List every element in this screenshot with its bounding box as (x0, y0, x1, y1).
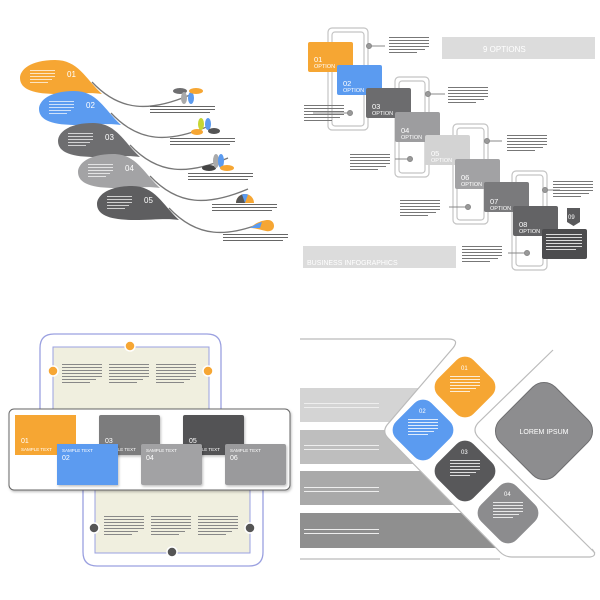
sample boxes: SAMPLE TEXT (21, 447, 52, 452)
diamond 02: 02 (419, 409, 426, 415)
sample boxes: SAMPLE TEXT (62, 448, 93, 453)
option boxes: 04 (401, 126, 409, 135)
drop 01: 01 (67, 70, 76, 79)
outer frame top (40, 334, 221, 410)
option boxes: OPTION (401, 135, 422, 141)
panel: 9 options (303, 28, 595, 270)
cream panel bottom (95, 489, 250, 553)
footer bar: business infographics (303, 246, 456, 268)
drop 03: 03 (105, 133, 114, 142)
drop 05 (97, 186, 267, 232)
option boxes: 05 (431, 149, 439, 158)
diamond 04 (473, 478, 543, 548)
diamond 04: 04 (504, 492, 511, 498)
sample boxes: 01 (21, 438, 29, 445)
connector dots and lines (313, 44, 560, 256)
sample boxes: SAMPLE TEXT (146, 448, 177, 453)
diamond 02 (388, 395, 458, 465)
diamond 01: 01 (461, 366, 468, 372)
diamond: lorem ipsum (489, 376, 599, 486)
sample boxes: 02 (62, 455, 70, 462)
chevron band fill (385, 342, 595, 557)
drop 02 (39, 91, 209, 137)
footer bar: business infographics: BUSINESS INFOGRAPHICS (307, 260, 398, 267)
drop 04 (78, 154, 248, 200)
sample boxes: 05 (189, 438, 197, 445)
option boxes: OPTION (372, 111, 393, 117)
panel: diamonds lorem ipsum (300, 339, 599, 559)
text blocks (62, 364, 238, 535)
diamond: lorem ipsum: LOREM IPSUM (519, 429, 569, 436)
option boxes: 08 (519, 220, 527, 229)
option boxes: 02 (343, 79, 351, 88)
panel: sample text frame (9, 334, 290, 566)
option boxes: 03 (372, 102, 380, 111)
sample boxes (15, 415, 286, 485)
drop 05: 05 (144, 196, 153, 205)
option boxes: OPTION (490, 206, 511, 212)
dots (48, 341, 255, 557)
sample boxes: 04 (146, 455, 154, 462)
icon: flower 3 (202, 154, 234, 171)
option boxes: OPTION (343, 88, 364, 94)
diamond 03 (430, 436, 500, 506)
sample boxes: SAMPLE TEXT (230, 448, 261, 453)
drop 04: 04 (125, 164, 134, 173)
icon: flower 1 (173, 88, 203, 104)
diamond 03: 03 (461, 450, 468, 456)
bars (300, 388, 497, 548)
header bar: 9 options (442, 37, 595, 59)
chevron outlines (300, 339, 595, 559)
sample boxes: SAMPLE TEXT (189, 447, 220, 452)
option boxes: OPTION (314, 64, 335, 70)
icon: flower 2 (191, 118, 220, 135)
option boxes: 09 (568, 215, 575, 221)
option boxes: 07 (490, 197, 498, 206)
sample boxes: SAMPLE TEXT (105, 447, 136, 452)
diamond 01 (430, 352, 500, 422)
sample boxes: 03 (105, 438, 113, 445)
drop 03 (58, 123, 228, 169)
option boxes: OPTION (461, 182, 482, 188)
icon: half pie (236, 194, 254, 203)
option boxes: OPTION (431, 158, 452, 164)
panel: drops infographic (20, 60, 288, 241)
option boxes: 01 (314, 55, 322, 64)
white band (9, 409, 290, 490)
header bar: 9 options: 9 OPTIONS (483, 45, 526, 54)
option boxes: OPTION (519, 229, 540, 235)
icon: small drop (250, 220, 274, 231)
option descriptions (304, 37, 593, 262)
option boxes: 06 (461, 173, 469, 182)
drop 02: 02 (86, 101, 95, 110)
outer frame bottom (83, 488, 263, 566)
cream panel top (53, 347, 209, 411)
connector loops (328, 28, 547, 270)
option boxes (308, 42, 587, 259)
drop 01 (20, 60, 190, 106)
text lines (150, 106, 288, 241)
sample boxes: 06 (230, 455, 238, 462)
